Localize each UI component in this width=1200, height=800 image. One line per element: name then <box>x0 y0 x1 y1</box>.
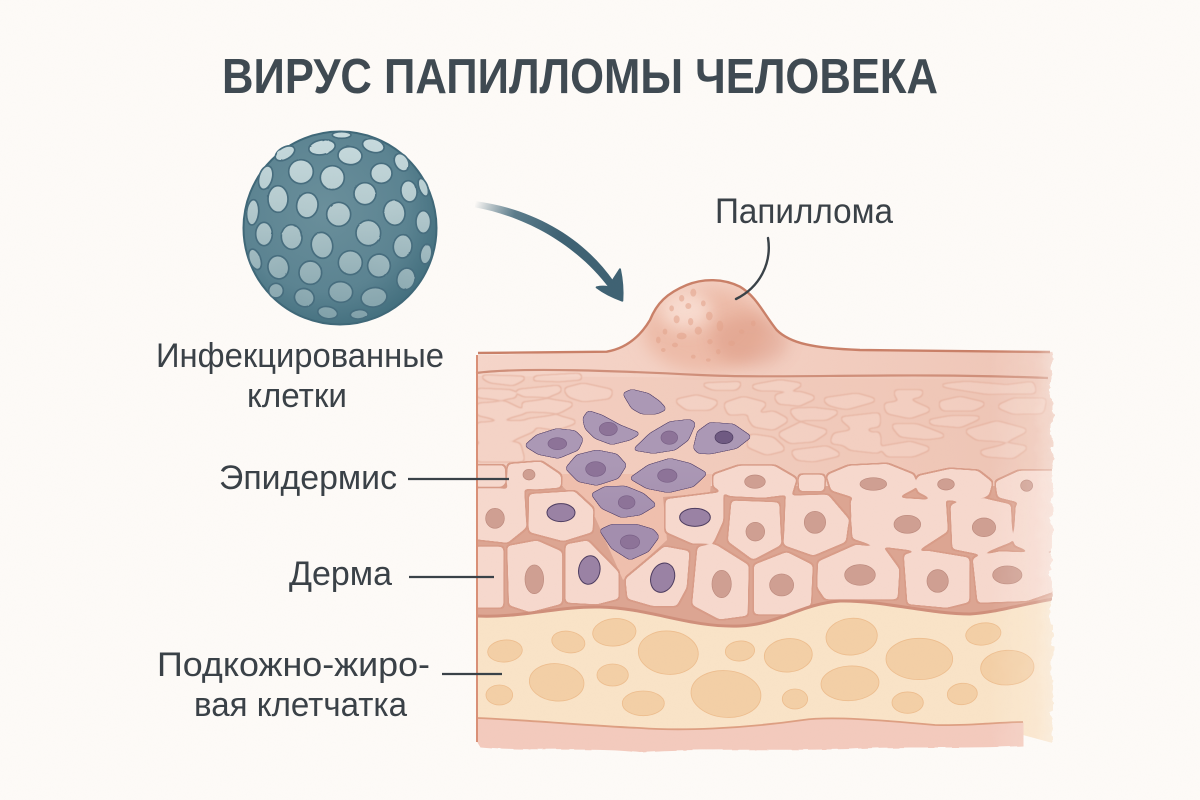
label: dermis with line: Дерма <box>289 555 392 593</box>
cells left part <box>477 464 846 617</box>
label: infected cells <box>156 337 444 415</box>
infected cell nuclei <box>548 422 733 549</box>
label: subcutaneous tissue with line: Подкожно-жиро- <box>157 646 430 684</box>
arrow from virus to papilloma <box>475 201 623 301</box>
skin cross-section <box>476 280 1060 752</box>
flattened upper cell mesh <box>477 373 1047 462</box>
cell layer underlay <box>477 486 1060 636</box>
fat globules right <box>820 616 1035 713</box>
label: infected cells: Инфекцированные <box>156 337 444 375</box>
cell nuclei <box>486 469 1033 598</box>
mesh left part <box>477 373 880 462</box>
mesh right part <box>830 382 1047 458</box>
label: papilloma with leader <box>715 192 894 299</box>
living cell layers <box>477 464 1060 617</box>
fat globules left <box>486 617 814 720</box>
title: ВИРУС ПАПИЛЛОМЫ ЧЕЛОВЕКА <box>222 50 938 104</box>
cells right part <box>820 467 1060 605</box>
corneum layer tint <box>477 376 1060 480</box>
sphere surface spots <box>246 132 433 320</box>
virus particle sphere <box>244 132 436 324</box>
label: epidermis with line: Эпидермис <box>219 459 397 497</box>
cell bodies <box>477 464 1060 617</box>
subcutaneous fat layer <box>477 598 1060 745</box>
fat bottom line <box>477 718 1023 729</box>
lower connective layer <box>477 718 1023 752</box>
skin top outline over papilloma <box>478 280 1050 353</box>
mesh cells <box>477 373 1047 462</box>
label: infected cells: клетки <box>247 377 347 415</box>
skin upper layers base <box>478 281 1055 486</box>
label: subcutaneous tissue with line <box>157 646 502 724</box>
infected purple cells <box>524 389 752 560</box>
papilloma bump shading <box>643 288 788 372</box>
nuclei right part <box>845 478 1033 592</box>
papilloma surface dots <box>656 289 756 362</box>
infected cell bodies <box>524 389 752 560</box>
label: papilloma with leader: Папиллома <box>715 192 894 231</box>
label: subcutaneous tissue with line: вая клетчатка <box>194 686 407 724</box>
nuclei left part <box>486 469 826 598</box>
stratum line <box>476 370 1048 378</box>
dermal boundary line <box>477 598 1060 626</box>
skin block left edge <box>476 355 478 742</box>
